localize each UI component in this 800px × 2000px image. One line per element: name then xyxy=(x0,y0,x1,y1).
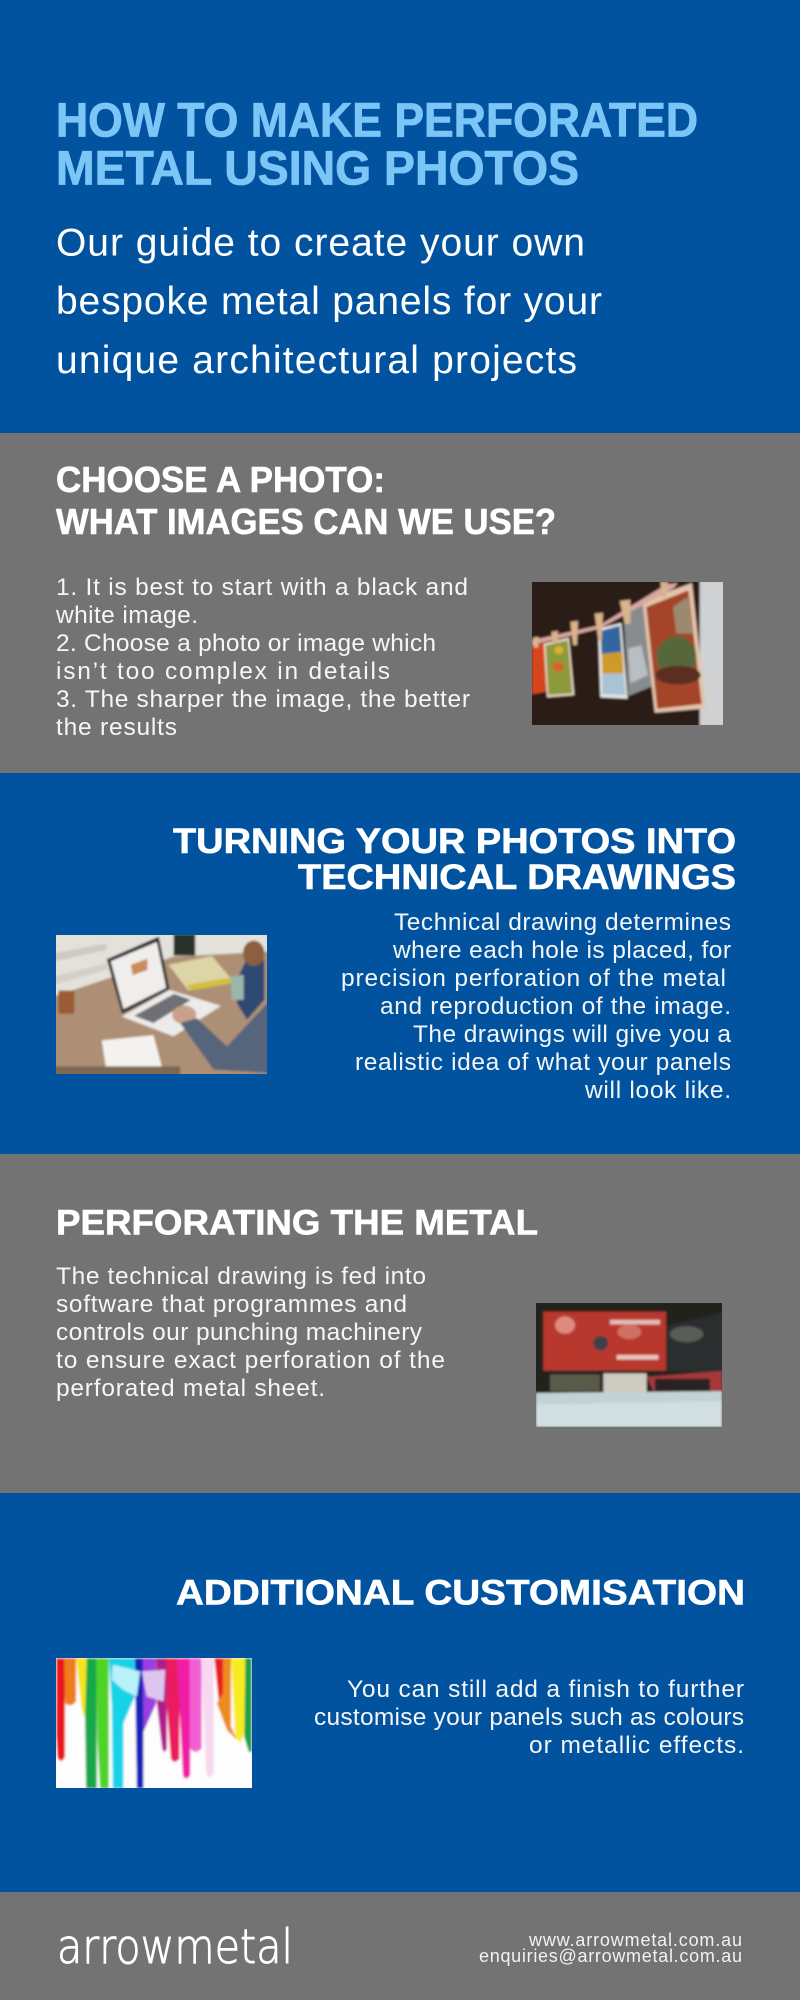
panel: technical drawings xyxy=(0,773,800,1154)
text block: perforating explanation: to ensure exact perforation of the xyxy=(56,1347,445,1374)
text block: photo tips: 1. It is best to start with a black and xyxy=(56,574,468,601)
text block: perforating explanation: controls our punching machinery xyxy=(56,1319,423,1346)
text block: photo tips: white image. xyxy=(55,602,198,629)
text block: technical drawing explanation: and reproduction of the image. xyxy=(380,993,731,1020)
text block: photo tips: 2. Choose a photo or image which xyxy=(56,630,436,657)
heading: choose a photo xyxy=(56,459,556,542)
panel: footer xyxy=(0,1892,800,2000)
photo: postcards on a line xyxy=(532,582,723,725)
text block: technical drawing explanation: precision perforation of the metal xyxy=(341,965,726,992)
text block: photo tips xyxy=(55,574,470,741)
title: METAL USING PHOTOS xyxy=(56,142,579,196)
heading: choose a photo: CHOOSE A PHOTO: xyxy=(56,459,385,500)
heading: technical drawings: TECHNICAL DRAWINGS xyxy=(298,858,736,897)
text block: perforating explanation: The technical drawing is fed into xyxy=(56,1263,426,1290)
photo: paint drips xyxy=(56,1658,252,1788)
text block: photo tips: 3. The sharper the image, the better xyxy=(56,686,470,713)
subtitle: Our guide to create your own xyxy=(56,222,585,264)
title: HOW TO MAKE PERFORATED xyxy=(56,94,698,148)
heading: perforating the metal: PERFORATING THE METAL xyxy=(56,1204,538,1242)
text block: perforating explanation xyxy=(56,1263,445,1402)
logo: arrowmetal: arrowmetal xyxy=(57,1920,293,1975)
text block: finishes xyxy=(314,1676,744,1759)
text block: technical drawing explanation: realistic idea of what your panels xyxy=(355,1049,731,1076)
text block: technical drawing explanation xyxy=(341,909,731,1104)
photo: punching machine xyxy=(536,1303,722,1427)
heading: choose a photo: WHAT IMAGES CAN WE USE? xyxy=(56,501,556,542)
heading: additional customisation: ADDITIONAL CUSTOMISATION xyxy=(176,1574,745,1612)
text block: finishes: customise your panels such as colours xyxy=(314,1704,744,1731)
text block: technical drawing explanation: will look like. xyxy=(584,1077,731,1104)
text block: photo tips: isn’t too complex in details xyxy=(56,658,390,685)
text block: perforating explanation: perforated metal sheet. xyxy=(56,1375,325,1402)
contact details: enquiries@arrowmetal.com.au xyxy=(479,1946,742,1966)
panel: header xyxy=(0,0,800,433)
contact details: www.arrowmetal.com.au xyxy=(528,1930,742,1950)
text block: photo tips: the results xyxy=(56,714,177,741)
text block: finishes: or metallic effects. xyxy=(529,1732,744,1759)
text block: finishes: You can still add a finish to further xyxy=(347,1676,744,1703)
photo: laptop on a desk xyxy=(56,935,267,1074)
text block: perforating explanation: software that programmes and xyxy=(56,1291,407,1318)
subtitle xyxy=(56,222,602,382)
title xyxy=(56,94,698,196)
text block: technical drawing explanation: Technical drawing determines xyxy=(394,909,731,936)
heading: technical drawings xyxy=(173,822,736,897)
text block: technical drawing explanation: where each hole is placed, for xyxy=(392,937,731,964)
contact details xyxy=(479,1930,742,1966)
panel: choose a photo xyxy=(0,433,800,773)
heading: technical drawings: TURNING YOUR PHOTOS INTO xyxy=(173,822,736,861)
subtitle: unique architectural projects xyxy=(56,339,577,382)
text block: technical drawing explanation: The drawings will give you a xyxy=(413,1021,731,1048)
subtitle: bespoke metal panels for your xyxy=(56,280,602,323)
panel: additional customisation xyxy=(0,1493,800,1892)
panel: perforating the metal xyxy=(0,1154,800,1493)
